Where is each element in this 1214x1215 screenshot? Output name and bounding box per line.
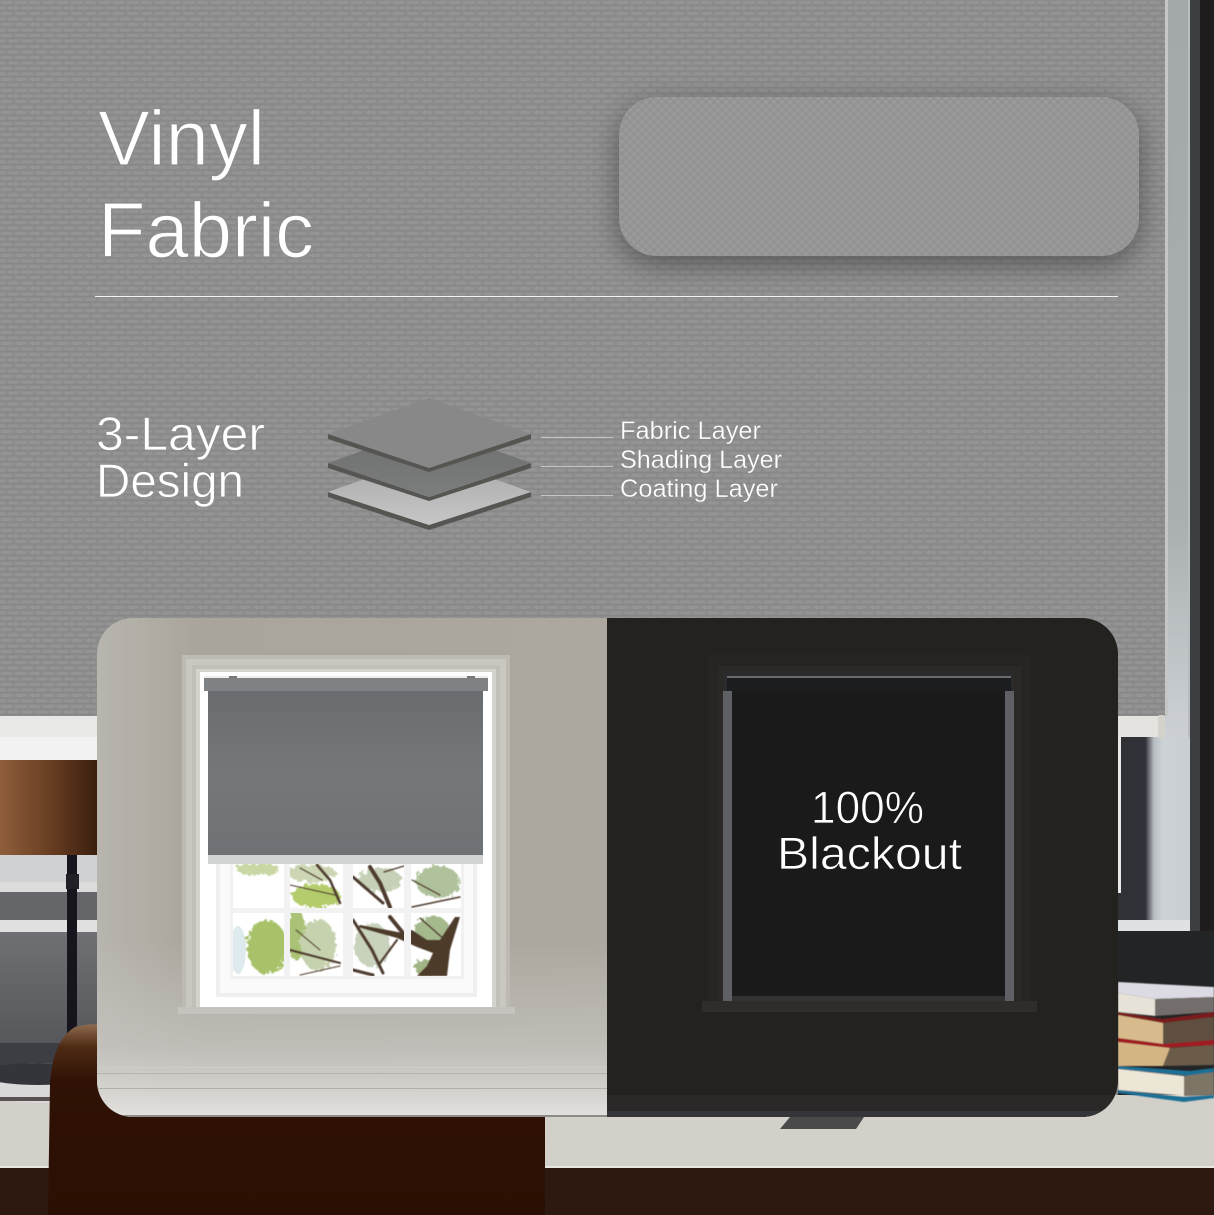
layer: fabric (328, 398, 531, 472)
room scene on the left (0, 716, 97, 1068)
title: Vinyl (98, 94, 265, 182)
desk (0, 1095, 1214, 1215)
window with shade half drawn (178, 655, 515, 1014)
mullions (233, 864, 461, 977)
layer: shading (328, 427, 531, 501)
diagram: layer stack (328, 398, 531, 530)
heading: 3-layer design: 3-Layer (96, 407, 265, 460)
divider rule (95, 296, 1118, 297)
panel half: light room (97, 618, 608, 1117)
heading: 3-layer design: Design (96, 454, 244, 507)
leader lines and layer labels: Shading Layer (620, 446, 782, 474)
leader lines and layer labels: Coating Layer (620, 475, 778, 503)
icon: book stack (1118, 982, 1214, 1102)
roller shade (204, 676, 488, 864)
title: Fabric (98, 186, 314, 274)
blackout window (702, 655, 1037, 1012)
label: 100% blackout (781, 792, 962, 870)
branches (290, 865, 460, 976)
panel half: dark room (607, 618, 1118, 1117)
layer: coating (328, 456, 531, 530)
leader lines and layer labels: Fabric Layer (620, 417, 761, 445)
title (98, 94, 314, 274)
fabric swatch (619, 97, 1139, 256)
icon: lamp (0, 760, 102, 1103)
label: 100% blackout: Blackout (777, 828, 963, 879)
window frame on the right (1165, 0, 1214, 1215)
fabric background (0, 0, 1166, 716)
chair (48, 1024, 545, 1215)
window view: tree (233, 864, 461, 976)
label: 100% blackout: 100% (811, 782, 924, 833)
leader lines and layer labels (541, 417, 782, 503)
heading: 3-layer design (96, 407, 265, 507)
room scene on the right (1118, 715, 1214, 1101)
panel: before and after comparison (97, 618, 1118, 1117)
foliage (236, 863, 460, 976)
